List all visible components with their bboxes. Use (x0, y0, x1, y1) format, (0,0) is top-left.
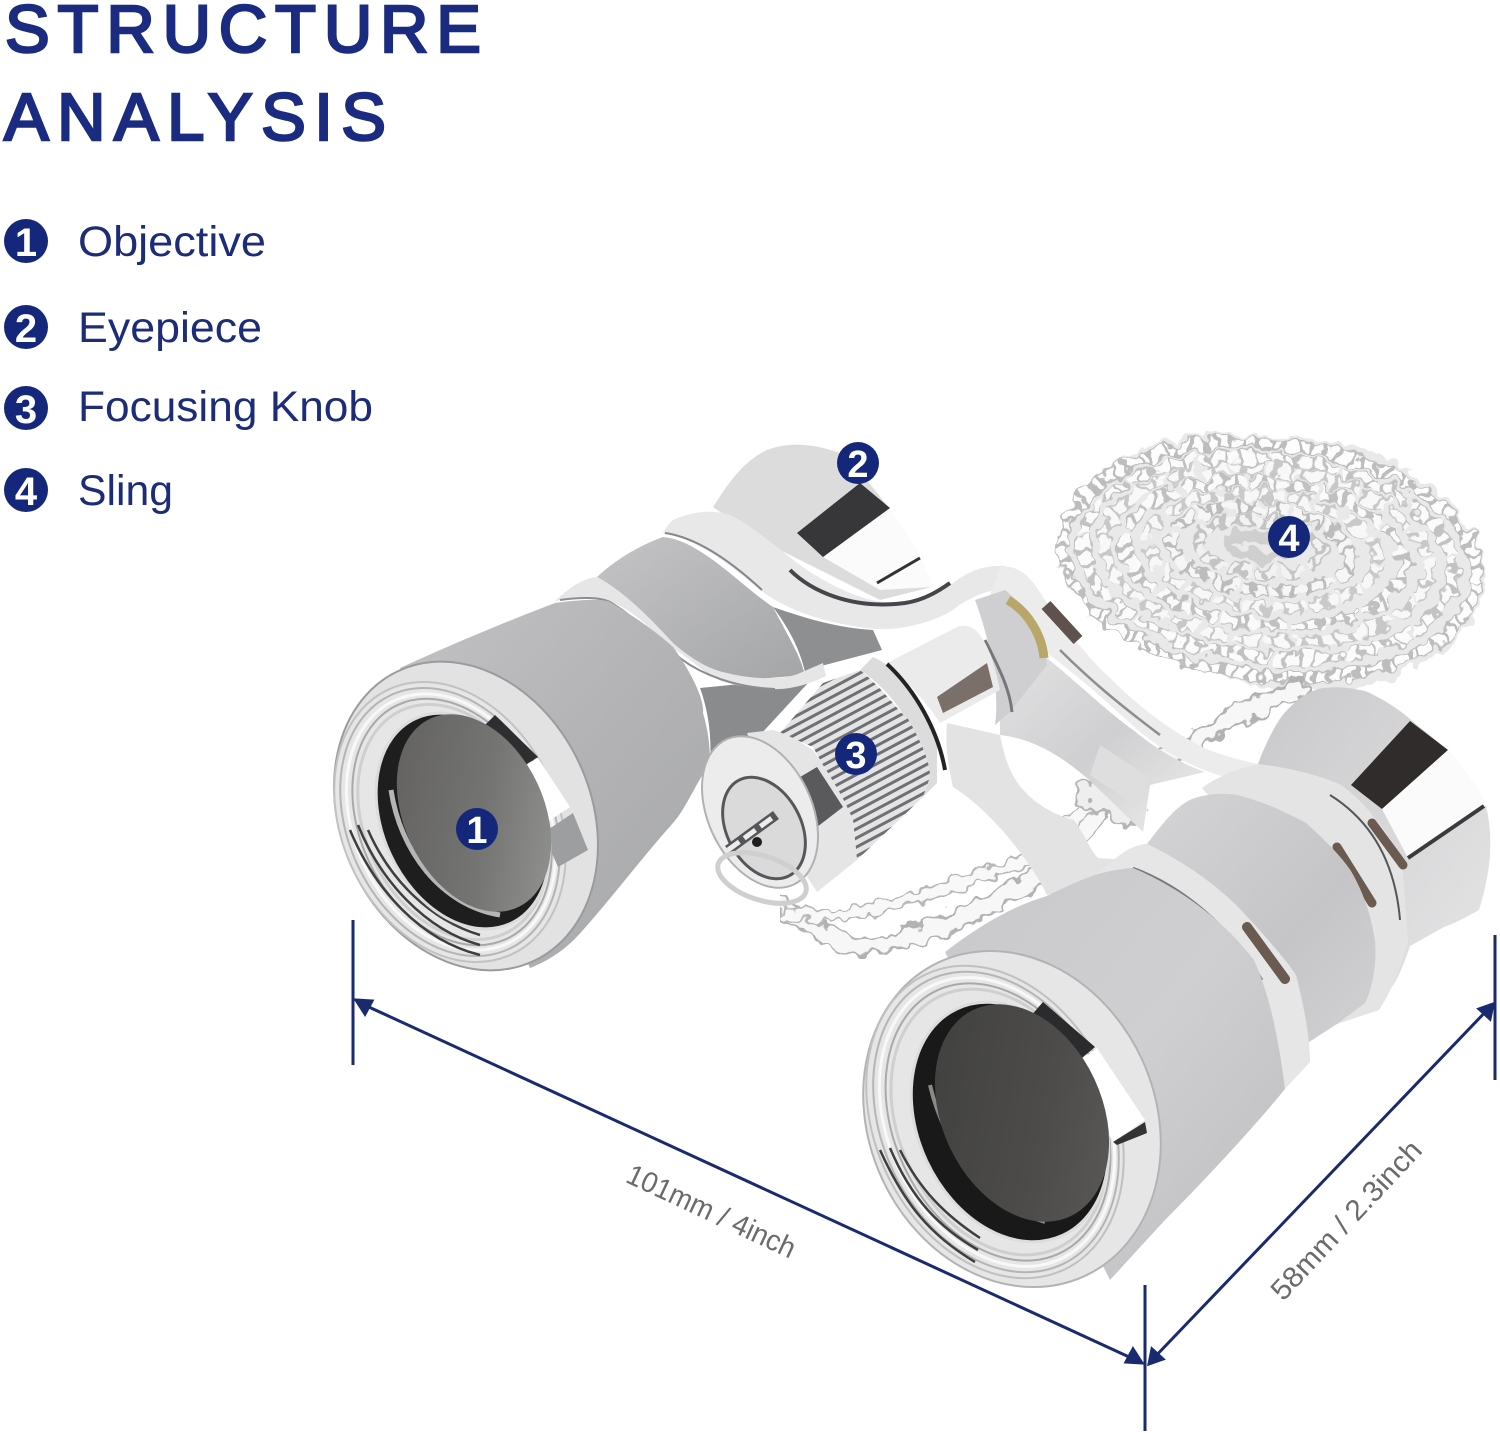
hinge tube (887, 626, 1000, 723)
lower bridge strip (946, 723, 1140, 895)
lens housing (343, 685, 583, 957)
knob collar (860, 657, 937, 797)
legend item 1: 1 (15, 221, 37, 265)
badge 3: 3 (845, 735, 867, 777)
focusing knob (679, 657, 945, 913)
label: 101mm / 4inch: 101mm / 4inch (621, 1159, 801, 1265)
badge 2: 2 (847, 444, 869, 486)
hinge (975, 590, 1047, 725)
badge 2 (837, 442, 879, 486)
legend item 3: Focusing Knob (78, 383, 373, 431)
dimension: depth (1149, 935, 1495, 1364)
legend item 2: Eyepiece (78, 304, 262, 352)
back barrel: grey body (597, 537, 882, 765)
ridge dark reflections (880, 1148, 980, 1262)
lens glass (367, 689, 581, 937)
left bridge strips (555, 512, 1005, 689)
legend item 1: Objective (78, 218, 266, 266)
legend item 4 (4, 467, 173, 515)
clasp pin and ring (711, 815, 813, 913)
back barrel: eyepiece (713, 445, 932, 600)
right barrel: eyepiece (1258, 687, 1490, 1006)
legend (4, 218, 373, 515)
legend item 1 (4, 218, 266, 266)
chrome bezel (285, 618, 647, 1014)
right upper bridge strip (990, 567, 1262, 790)
legend item 2: 2 (15, 307, 37, 351)
legend item 3: 3 (15, 388, 37, 432)
knob barrel (747, 730, 857, 892)
left barrel: cone body (400, 600, 710, 968)
eyepiece highlight (1382, 750, 1486, 858)
ridged front ring (817, 924, 1173, 1320)
eyepiece dark band (797, 483, 890, 557)
knob ribs (780, 670, 930, 860)
right objective assembly (809, 902, 1215, 1336)
chain strands to knob (785, 690, 1300, 946)
right barrel: cone body (945, 868, 1285, 1280)
eyepiece highlight (823, 508, 932, 590)
bezel reflections (1023, 1002, 1095, 1068)
dimension: width (353, 920, 1145, 1431)
right barrel: front band (1095, 844, 1310, 1089)
ridged front ring (290, 644, 610, 1000)
left objective assembly (285, 618, 647, 1014)
legend item 4: Sling (78, 467, 173, 515)
right barrel: rear band (1202, 764, 1408, 1024)
chain patch on plate (1090, 745, 1150, 802)
right barrel: mid grey body (1147, 794, 1375, 1044)
badge 1 (456, 808, 498, 852)
knob cap (679, 718, 841, 906)
chrome bezel (809, 902, 1215, 1336)
right bridge plate (1000, 655, 1205, 832)
eyepiece dark band (1351, 721, 1448, 809)
right lens glass (901, 976, 1143, 1250)
legend item 4: 4 (15, 470, 38, 514)
ridge dark reflections (350, 825, 480, 955)
badge 4 (1268, 516, 1310, 560)
badge 4: 4 (1278, 518, 1300, 560)
lens housing (874, 970, 1146, 1274)
title (4, 0, 481, 155)
title: ANALYSIS (4, 80, 386, 155)
badge 1: 1 (466, 810, 488, 852)
legend item 2 (4, 304, 262, 352)
sling chain coil (1051, 423, 1489, 697)
label: 58mm / 2.3inch: 58mm / 2.3inch (1265, 1134, 1429, 1307)
bezel reflections (475, 715, 538, 775)
badge 3 (835, 733, 877, 777)
